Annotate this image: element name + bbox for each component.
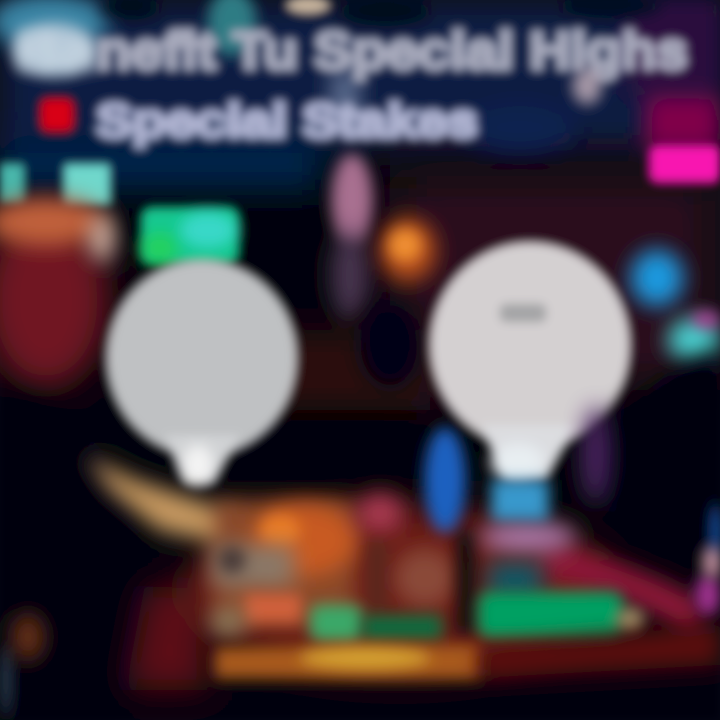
background figure bbox=[332, 154, 420, 387]
title: nefit Tu Special Highs bbox=[96, 21, 688, 81]
title bbox=[14, 19, 688, 148]
orange lamp bbox=[380, 218, 436, 282]
green glow above left balloon bbox=[142, 208, 238, 264]
speech balloon: right bbox=[430, 242, 630, 480]
speech balloon: left bbox=[107, 260, 297, 485]
title: Ba bbox=[14, 19, 97, 82]
roulette table bbox=[85, 455, 720, 678]
seated figure bbox=[0, 198, 208, 720]
blue lights on right bbox=[631, 250, 720, 362]
teal lights bbox=[0, 164, 110, 204]
blue bottle and bottle stream bbox=[425, 428, 548, 532]
dark figure right bbox=[582, 350, 720, 560]
neon sign: pink bbox=[645, 95, 720, 182]
icon: red marker bbox=[40, 98, 74, 132]
title: Special Stakes bbox=[96, 95, 478, 148]
